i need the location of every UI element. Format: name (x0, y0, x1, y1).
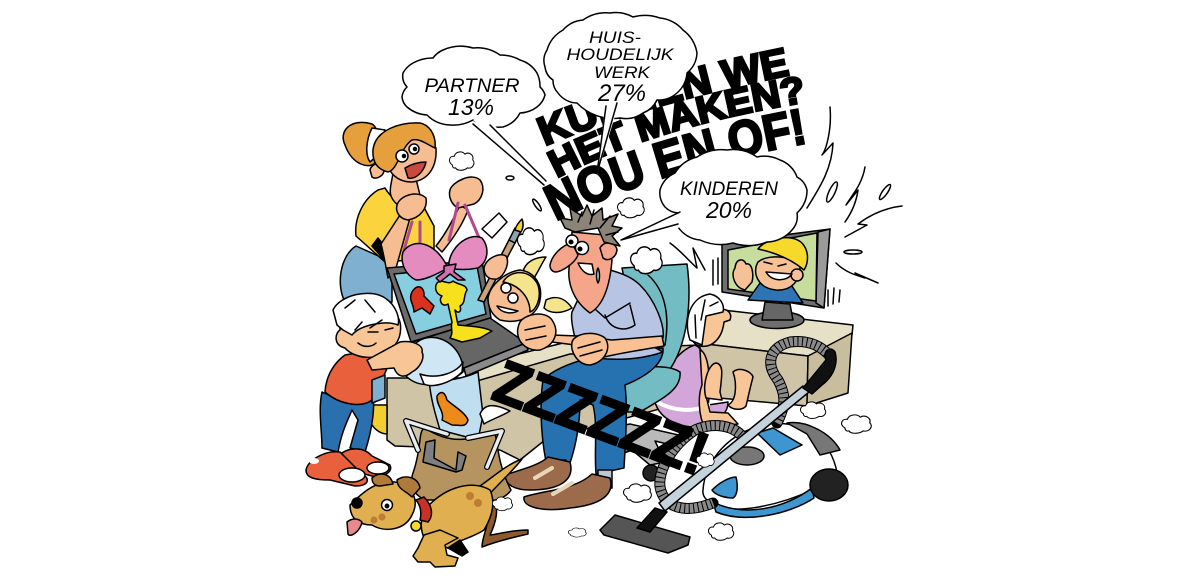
brown tail puddle (482, 500, 528, 547)
yellow paint splat and spill (436, 281, 492, 342)
headline (535, 46, 806, 222)
body (421, 485, 493, 548)
speech bubble: huishoudelijk werk 27%: 27% (597, 80, 646, 107)
girl behind laptop (484, 255, 572, 321)
lilac shirt (655, 345, 728, 427)
headline: KUNNEN WE (535, 46, 790, 146)
blue office chair (600, 264, 689, 412)
speech bubble: huishoudelijk werk 27% (544, 13, 697, 175)
small child behind chair (655, 294, 753, 428)
goldfish (437, 393, 468, 426)
yellow shoe behind (370, 405, 387, 434)
rear shoe (338, 449, 391, 476)
laptop (387, 260, 528, 376)
speech bubble: partner 13%: 13% (448, 94, 494, 120)
woman holding a bra (340, 122, 483, 302)
vacuum hose (660, 341, 827, 508)
red paint splat (411, 287, 434, 314)
arm and hand on bowl (367, 342, 423, 376)
bra (402, 203, 487, 282)
collar (416, 497, 431, 522)
speech bubble: kinderen 20%: KINDEREN (680, 179, 778, 200)
office chair base (600, 424, 683, 481)
head (350, 482, 415, 529)
headline: HET MAKEN? (546, 76, 802, 178)
hands (397, 194, 426, 220)
headline: NOU EN OF! (542, 108, 806, 222)
vacuum cleaner body (703, 423, 848, 517)
neck (390, 172, 420, 208)
bare feet (705, 363, 722, 400)
man: head (550, 205, 622, 313)
speech bubble: partner 13%: PARTNER (424, 76, 520, 97)
left desk section (387, 340, 700, 460)
boy pouring fish bowl (306, 293, 423, 486)
ear and face (370, 164, 384, 178)
speech bubble: kinderen 20% (620, 149, 807, 246)
dog (347, 459, 528, 567)
fish bowl and water (405, 337, 510, 440)
yellow shirt (356, 188, 434, 262)
head (336, 315, 401, 357)
paint brush and paper note (478, 213, 523, 302)
bag with grey handle (406, 421, 511, 502)
head (690, 298, 731, 346)
grey hair (560, 205, 622, 246)
vacuum tube and floor nozzle (600, 349, 836, 553)
eyes and mouth (396, 150, 408, 162)
man: legs and shoes (505, 348, 663, 510)
sleeping zzz text: ZZZZZZ! (485, 347, 717, 488)
hair bun (343, 122, 378, 166)
front shoe (306, 452, 367, 486)
man: torso, arms and fists (518, 262, 664, 365)
dust clouds and speed lines (449, 107, 902, 540)
computer monitor (722, 229, 830, 328)
speech bubble: huishoudelijk werk 27%: WERK (594, 63, 651, 82)
speech bubble: partner 13% (402, 46, 546, 185)
right desk section (697, 310, 853, 406)
hair (373, 123, 435, 172)
speech bubble: huishoudelijk werk 27%: HOUDELIJK (566, 45, 674, 64)
speech bubble: huishoudelijk werk 27%: HUIS- (589, 28, 641, 47)
man on screen with hard hat (733, 238, 808, 303)
jeans (340, 246, 392, 302)
legs (320, 392, 374, 452)
red shirt (325, 352, 387, 404)
arms (381, 215, 410, 278)
arm and hand (699, 350, 738, 428)
speech bubble: kinderen 20%: 20% (705, 197, 752, 223)
